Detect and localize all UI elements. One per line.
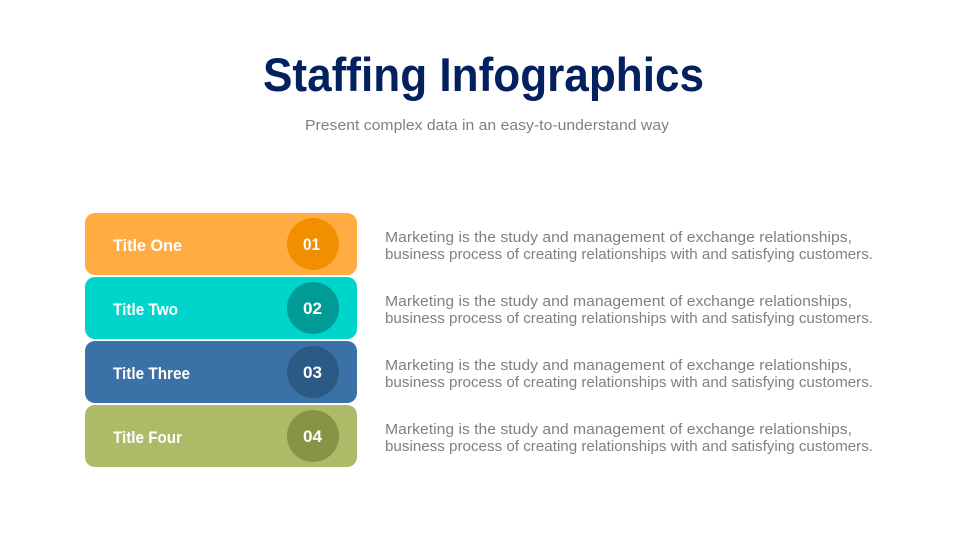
badge: 03 bbox=[287, 346, 339, 398]
text block: row one description bbox=[385, 229, 873, 263]
badge: 01: 01 bbox=[303, 235, 320, 254]
text block: row three description bbox=[385, 357, 873, 391]
bar: row one bbox=[85, 213, 357, 275]
panel: row four bbox=[85, 405, 357, 467]
subtitle: Present complex data in an easy-to-understand way bbox=[305, 117, 670, 134]
label: Title Four: Title Four bbox=[113, 428, 182, 447]
text block: row three description: business process of creating relationships with and satisfying customers. bbox=[385, 374, 873, 391]
text block: row two description: business process of creating relationships with and satisfying customers. bbox=[385, 310, 873, 327]
badge: 03: 03 bbox=[303, 363, 322, 382]
badge: 04 bbox=[287, 410, 339, 462]
text block: row four description: business process of creating relationships with and satisfying customers. bbox=[385, 438, 873, 455]
text block: row four description bbox=[385, 421, 873, 455]
text block: row three description: Marketing is the study and management of exchange relationships, bbox=[385, 357, 852, 374]
text block: row one description: business process of creating relationships with and satisfying customers. bbox=[385, 246, 873, 263]
bar: row four bbox=[85, 405, 357, 467]
badge: 04: 04 bbox=[303, 427, 323, 446]
text block: row two description: Marketing is the study and management of exchange relationships, bbox=[385, 293, 852, 310]
title: Staffing Infographics bbox=[263, 48, 704, 101]
panel: row three bbox=[85, 341, 357, 403]
label: Title Two: Title Two bbox=[113, 300, 178, 319]
badge: 02 bbox=[287, 282, 339, 334]
panel: row two bbox=[85, 277, 357, 339]
text block: row one description: Marketing is the study and management of exchange relationships, bbox=[385, 229, 852, 246]
text block: row two description bbox=[385, 293, 873, 327]
badge: 02: 02 bbox=[303, 299, 322, 318]
text block: row four description: Marketing is the study and management of exchange relationships, bbox=[385, 421, 852, 438]
bar: row two bbox=[85, 277, 357, 339]
label: Title One: Title One bbox=[113, 236, 182, 255]
label: Title Three: Title Three bbox=[113, 364, 190, 383]
panel: row one bbox=[85, 213, 357, 275]
bar: row three bbox=[85, 341, 357, 403]
badge: 01 bbox=[287, 218, 339, 270]
